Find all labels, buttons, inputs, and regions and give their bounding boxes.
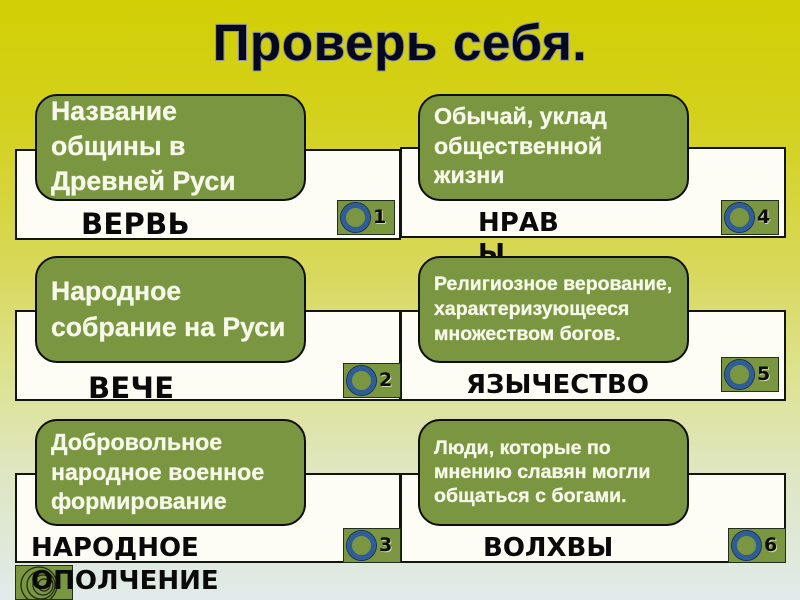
badge 4 [721,200,779,235]
answer: НРАВЫ [478,208,559,269]
question card 1: общины в [51,131,185,161]
badge 2: 2 [379,369,392,391]
panel: answer 6 [400,473,786,563]
badge 2 [343,363,401,398]
badge 3: 3 [379,534,392,556]
badge 6 [728,528,786,563]
panel: answer 4 [400,147,786,238]
question card 4: Обычай, уклад [434,103,607,129]
question card 6: мнению славян могли [434,461,650,483]
question card 3 [35,419,306,526]
question card 6: общаться с богами. [434,485,627,507]
question card 5: характеризующееся [434,298,629,320]
question card 4: жизни [434,162,504,188]
question card 6 [418,419,689,526]
answer: НАРОДНОЕ ОПОЛЧЕНИЕ: ОПОЛЧЕНИЕ [31,566,219,596]
question card 4 [418,94,689,201]
question card 2 [35,256,306,363]
answer: НАРОДНОЕ ОПОЛЧЕНИЕ: НАРОДНОЕ [31,533,199,563]
question card 1: Древней Руси [51,166,236,196]
answer: ВЕРВЬ: ВЕРВЬ [81,207,190,241]
answer: НРАВЫ: Ы [478,239,505,269]
badge 3 [343,528,401,563]
answer: ВЕЧЕ: ВЕЧЕ [88,371,174,405]
question card 2: Народное [51,276,181,306]
panel: answer 1 [15,149,401,240]
question card 2: собрание на Руси [51,312,285,342]
question card 6: Люди, которые по [434,437,611,459]
panel: answer 2 [15,310,401,401]
title: Проверь себя. [213,14,587,71]
question card 4: общественной [434,132,602,158]
answer: НАРОДНОЕ ОПОЛЧЕНИЕ [31,533,219,596]
question card 3: Добровольное [51,429,222,455]
answer: ЯЗЫЧЕСТВО: ЯЗЫЧЕСТВО [466,370,649,400]
question card 1: Название [51,96,177,126]
bottom navigation button [15,565,73,600]
panel: answer 5 [400,310,786,401]
question card 5 [418,256,689,363]
badge 1 [337,200,395,235]
question card 3: народное военное [51,458,264,484]
question card 5: множеством богов. [434,323,621,345]
question card 3: формирование [51,488,227,514]
question card 5: Религиозное верование, [434,273,672,295]
badge 5 [721,357,779,392]
answer: НРАВЫ: НРАВ [478,208,559,238]
question card 1 [35,94,306,201]
answer: ВОЛХВЫ: ВОЛХВЫ [483,533,613,563]
panel: answer 3 [15,473,401,563]
badge 6: 6 [764,534,777,556]
badge 4: 4 [757,206,770,228]
badge 5: 5 [757,363,770,385]
badge 1: 1 [373,206,386,228]
